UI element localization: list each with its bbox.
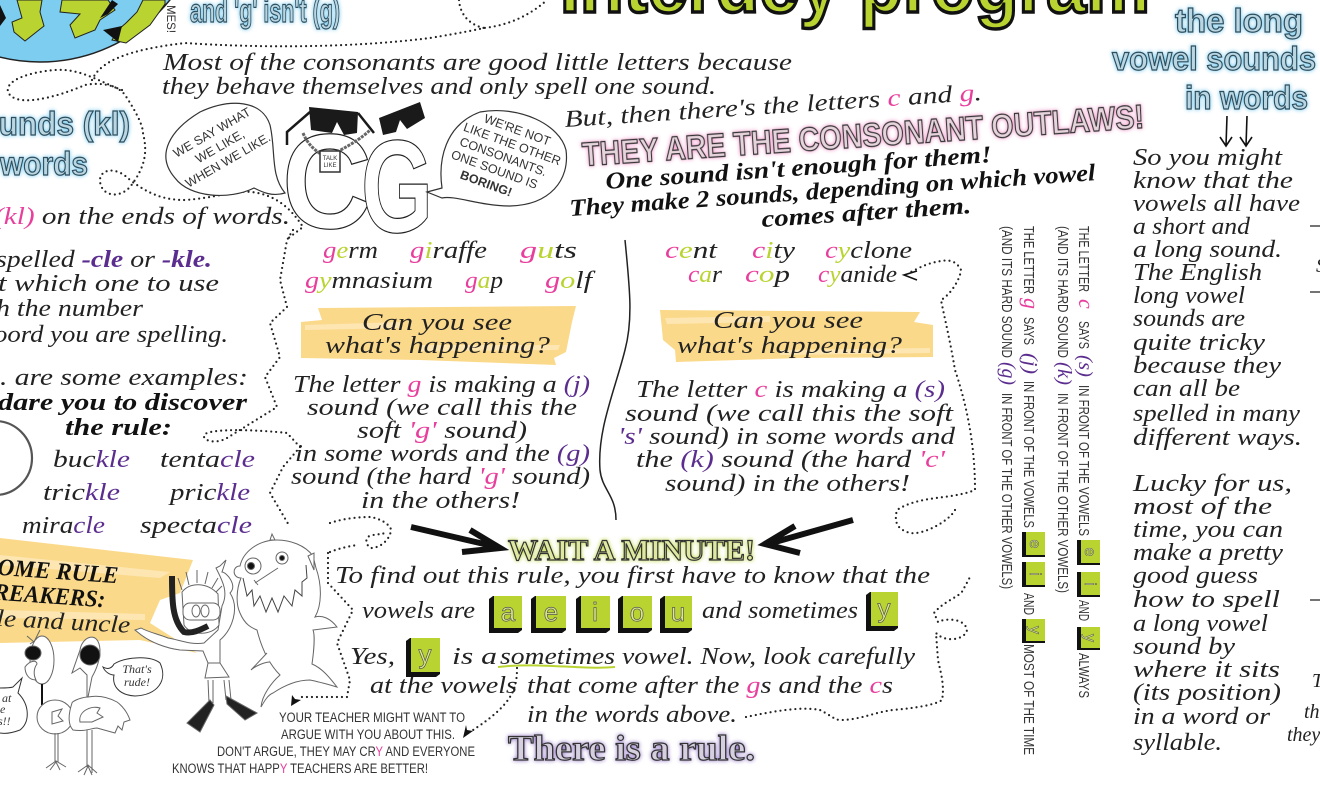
note: letter g: IN FRONT OF THE VOWELS: [1020, 381, 1037, 528]
text: letter g explanation: sound (we call this the: [307, 395, 577, 421]
icon: necklace: TALK: [323, 156, 337, 162]
speech bubble: left cropped: at: [2, 691, 12, 705]
text: vowels rule: in the words above.: [527, 702, 737, 728]
letters C and G: G: [361, 113, 433, 260]
text: vowels rule: To find out this rule, you first have to know that the: [335, 563, 930, 589]
tile: e: e: [544, 597, 558, 627]
tile: o: o: [630, 597, 644, 627]
note: letter c: THE LETTER: [1075, 226, 1092, 292]
speech bubble: that's rude: [103, 658, 163, 696]
banner: some rule breakers: [0, 538, 197, 653]
speech bubble: we say what we like: WHEN WE LIKE.: [183, 130, 273, 190]
word list: cle and kle: pric kle: [168, 480, 250, 506]
vertical notes: [997, 226, 1100, 755]
note: letter g: g: [1019, 298, 1044, 309]
tile: a: a: [501, 597, 516, 627]
text: long vowels column: spelled in many: [1133, 401, 1300, 427]
banner: can you see right: what's happening?: [677, 333, 902, 359]
letters C and G: C: [282, 106, 372, 257]
text: long vowels column: Lucky for us,: [1132, 471, 1292, 497]
word list: c words: [665, 238, 912, 288]
heading: kl sounds: words: [0, 145, 88, 182]
text: long vowels column: a long vowel: [1133, 611, 1268, 637]
text: long vowels column: syllable.: [1133, 730, 1222, 756]
text: vowels rule: vowels are: [362, 598, 475, 624]
small tiles: e: [1081, 548, 1098, 557]
text: one sound isn't enough: [569, 142, 1097, 233]
text: long vowels column: a long sound.: [1133, 237, 1282, 263]
tile: y second: [406, 638, 440, 677]
note: letter c: [1074, 226, 1099, 698]
text: vowels rule: is a: [452, 644, 497, 670]
heading: kl sounds: [0, 105, 130, 182]
heading: there is a rule: There is a rule.: [508, 728, 755, 768]
tile: u: [660, 596, 692, 633]
small tiles: e: [1026, 540, 1043, 549]
speech bubble: that's rude: rude!: [124, 675, 150, 689]
text: letter g explanation: [291, 372, 590, 514]
text: spelled cle or kle: t which one to use: [0, 271, 219, 297]
cropped edge content: th: [1304, 701, 1320, 723]
text: spelled cle or kle: dare you to discover: [0, 390, 248, 416]
text: vowels rule: vowel. Now, look carefully: [622, 644, 915, 670]
note: hard c: [1053, 226, 1075, 593]
word list: g words: guts: [520, 238, 577, 264]
note: letter c: SAYS: [1075, 321, 1092, 349]
flamingo right: [69, 637, 130, 775]
note: letter g: MOST OF THE TIME: [1020, 644, 1037, 755]
note: teacher: YOUR TEACHER MIGHT WANT TO: [279, 710, 465, 725]
text: letter c explanation: sound) in the others!: [665, 471, 910, 497]
note: letter c: ALWAYS: [1075, 653, 1092, 698]
arrow: dotted arrowhead: [904, 271, 917, 280]
text: spelled cle or kle: [0, 247, 248, 441]
speech bubble: we say what we like: WE SAY WHAT: [171, 105, 253, 160]
note: letter c: c: [1074, 299, 1099, 309]
text: long vowels column: The English: [1133, 260, 1262, 286]
tile: e: [531, 596, 566, 633]
speech bubble: not like the other consonants: WE'RE NOT: [482, 112, 553, 149]
heading: wait a minute: WAIT A MINUTE!: [508, 534, 755, 567]
text: long vowels column: different ways.: [1133, 425, 1302, 451]
text: letter g explanation: soft 'g' sound): [357, 418, 527, 444]
speech bubble: not like the other consonants: ONE SOUND IS: [449, 148, 540, 192]
illustration: flamingos: [0, 630, 163, 775]
heading: long vowel sounds: in words: [1185, 79, 1308, 116]
cropped edge content: [1287, 226, 1320, 746]
small tiles: i: [1081, 582, 1098, 586]
letters C and G: [282, 106, 433, 260]
text: letter g explanation: in some words and the (g): [295, 441, 590, 467]
note: hard g: (g): [997, 362, 1019, 385]
tile: i: i: [592, 597, 598, 627]
vowel tiles: [489, 592, 898, 633]
word list: cle and kle: miracle: [22, 513, 105, 539]
note: letter c: IN FRONT OF THE VOWELS: [1075, 385, 1092, 536]
speech bubble: we say what we like: [166, 103, 285, 195]
text: spelled cle or kle: oord you are spelling.: [0, 322, 228, 348]
word list: c words: cyanide: [818, 262, 897, 288]
text: spelled cle or kle: . are some examples:: [0, 365, 248, 391]
text: letter g explanation: The letter g is making a (j): [293, 372, 590, 398]
word list: c words: cent: [665, 238, 719, 264]
small tiles: [1022, 532, 1100, 650]
speech bubble: not like the other consonants: CONSONANTS.: [458, 135, 549, 179]
banner: can you see left: Can you see: [362, 310, 512, 336]
text: long vowels column: in a word or: [1133, 704, 1271, 730]
word list: cle and kle: [22, 447, 255, 539]
word list: cle and kle: tenta cle: [160, 447, 255, 473]
heading: consonant outlaws: THEY ARE THE CONSONANT OUTLAWS!: [581, 98, 1145, 173]
text: long vowels column: most of the: [1133, 494, 1272, 520]
word list: c words: cop: [745, 262, 790, 288]
word list: cle and kle: specta cle: [140, 513, 252, 539]
text: long vowels column: how to spell: [1133, 587, 1280, 613]
text: long vowels column: quite tricky: [1133, 330, 1265, 356]
text: long vowels column: where it sits: [1133, 657, 1280, 683]
text: letter c explanation: The letter c is making a (s): [636, 377, 945, 403]
text: long vowels column: sounds are: [1133, 306, 1245, 332]
text: vowels rule: sometimes: [500, 644, 615, 670]
tile: i: [576, 596, 610, 633]
text: long vowels column: long vowel: [1133, 283, 1245, 309]
text: vowels rule: and sometimes: [702, 598, 858, 624]
word list: cle and kle: tric kle: [43, 480, 120, 506]
text: kl on the ends of words: (kl) on the ends of words.: [0, 204, 290, 230]
shark: [234, 534, 337, 707]
text: letter c explanation: sound (we call this the soft: [625, 401, 955, 427]
text: long vowels column: vowels all have: [1133, 191, 1300, 217]
text: long vowels column: because they: [1133, 353, 1281, 379]
text: vowels rule: at the vowels: [370, 673, 517, 699]
text: long vowels column: good guess: [1133, 563, 1258, 589]
note: teacher: DON'T ARGUE, THEY MAY CRY AND EVERYONE: [217, 744, 475, 759]
banner: can you see left: what's happening?: [325, 333, 550, 359]
banner: can you see right: Can you see: [713, 308, 863, 334]
arrowheads: to note: [291, 695, 473, 738]
text: long vowels column: make a pretty: [1133, 540, 1283, 566]
arrows: down to vowel text: [1220, 116, 1252, 146]
word list: cle and kle: buc kle: [53, 447, 130, 473]
word list: g words: gap: [465, 268, 503, 294]
text: one sound isn't enough: One sound isn't enough for them!: [605, 142, 992, 195]
banner: can you see right: [660, 308, 933, 362]
word list: g words: gymnasium: [305, 268, 433, 294]
note: letter g: [1019, 226, 1044, 755]
word list: g words: [305, 238, 596, 294]
text: long vowels column: a short and: [1133, 214, 1251, 240]
text: letter c explanation: 's' sound) in some words and: [618, 424, 956, 450]
note: letter c: AND: [1075, 600, 1092, 621]
flamingo left: [25, 630, 73, 770]
small tiles: i: [1026, 572, 1043, 576]
heading: long vowel sounds: [1112, 2, 1316, 116]
cropped edge content: they: [1287, 724, 1320, 746]
icon: circle: [0, 421, 32, 495]
icon: necklace: [303, 130, 370, 172]
tile: y: [866, 592, 898, 631]
note: letter c: (s): [1074, 355, 1096, 377]
word list: c words: cyclone: [825, 238, 912, 264]
text: one sound isn't enough: They make 2 sounds, depending on which vowel: [569, 160, 1097, 222]
text: one sound isn't enough: comes after them.: [761, 193, 972, 233]
word list: c words: city: [752, 238, 795, 264]
tile: o: [618, 596, 652, 633]
banner: can you see left: [301, 306, 576, 365]
note: teacher: [172, 710, 475, 776]
speech bubble: not like the other consonants: [427, 105, 568, 212]
text: vowels rule: Yes,: [350, 644, 395, 670]
text: spelled cle or kle: spelled -cle or -kle.: [0, 247, 212, 273]
small tiles: y: [1081, 634, 1098, 642]
arrows: to wait a minute: [411, 520, 853, 553]
icon: globe: [0, 0, 207, 62]
dotted paths: [8, 0, 975, 732]
note: hard g: [997, 226, 1019, 589]
speech bubble: left cropped: e: [0, 702, 6, 716]
word list: g words: golf: [545, 268, 596, 294]
underline: sometimes: [498, 665, 615, 668]
text: long vowels column: [1132, 145, 1302, 756]
icon: necklace: LIKE: [323, 163, 337, 169]
text: consonants intro: they behave themselves and only spell one sound.: [162, 74, 716, 100]
text: letter c explanation: the (k) sound (the hard 'c': [636, 447, 946, 473]
tile: a: [489, 596, 522, 633]
small tiles: y: [1026, 626, 1043, 634]
word list: g words: germ: [323, 238, 378, 264]
text: long vowels column: (its position): [1133, 680, 1281, 706]
note: letter g: AND: [1020, 593, 1037, 615]
text: long vowels column: So you might: [1133, 145, 1284, 171]
signature: MES!: [164, 5, 178, 33]
note: teacher: KNOWS THAT HAPPY TEACHERS ARE BETTER!: [172, 761, 428, 776]
speech bubble: not like the other consonants: BORING!: [458, 168, 514, 200]
text: vowels rule: [335, 563, 930, 728]
note: teacher: ARGUE WITH YOU ABOUT THIS.: [281, 727, 455, 742]
tile: y: y: [878, 593, 890, 623]
note: letter g: THE LETTER: [1020, 226, 1037, 294]
tile: y second: y: [418, 639, 432, 669]
text: long vowels column: sound by: [1133, 634, 1235, 660]
note: hard c: IN FRONT OF THE OTHER VOWELS): [1054, 393, 1071, 593]
note: hard g: IN FRONT OF THE OTHER VOWELS): [998, 393, 1015, 589]
text: long vowels column: time, you can: [1133, 517, 1283, 543]
speech bubble: that's rude: That's: [122, 662, 152, 676]
text: letter c explanation: [618, 377, 956, 497]
column: soft and hard c: [618, 238, 956, 497]
note: hard c: (k): [1053, 362, 1075, 385]
speech bubble: left cropped: [0, 678, 27, 733]
speech bubble: not like the other consonants: LIKE THE OTHER: [462, 120, 563, 168]
icon: sunglasses: [287, 102, 425, 145]
text: consonants intro: [162, 50, 792, 100]
word list: g words: giraffe: [410, 238, 487, 264]
text: long vowels column: know that the: [1133, 168, 1293, 194]
note: letter g: (j): [1019, 353, 1041, 374]
text: consonants intro: Most of the consonants are good little letters because: [162, 50, 792, 76]
tile: u: u: [671, 597, 685, 627]
column: soft and hard g: [291, 238, 596, 514]
text: but then there's c and g: But, then there's the letters c and g.: [564, 80, 983, 133]
note: hard g: (AND ITS HARD SOUND: [998, 226, 1015, 358]
text: letter g explanation: in the others!: [361, 488, 520, 514]
heading: long vowel sounds: the long: [1175, 2, 1303, 39]
word list: c words: car: [688, 262, 723, 288]
text: vowels rule: that come after the gs and the cs: [527, 673, 893, 699]
divider: [600, 240, 630, 520]
note: letter g: SAYS: [1020, 317, 1037, 345]
illustration: diver and shark: [135, 534, 337, 732]
text: letter g explanation: sound (the hard 'g' sound): [291, 464, 590, 490]
text: long vowels column: can all be: [1133, 376, 1240, 402]
speech bubble: we say what we like: WE LIKE,: [193, 127, 247, 166]
illustration: CG outlaws: [166, 102, 568, 260]
text: spelled cle or kle: the rule:: [65, 415, 172, 441]
note: hard c: (AND ITS HARD SOUND: [1054, 226, 1071, 358]
diver: [135, 560, 257, 732]
